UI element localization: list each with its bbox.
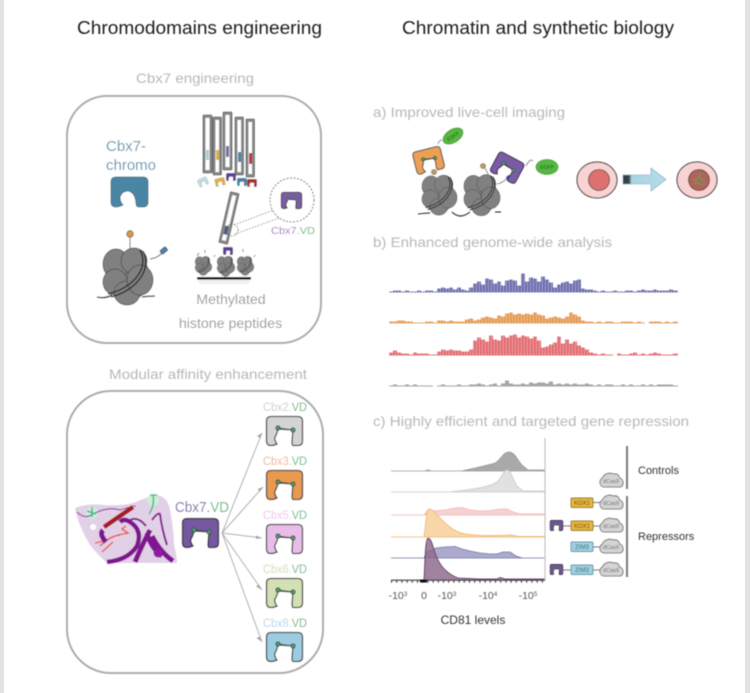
- axis label: CD81 levels: [441, 613, 505, 627]
- linker 1: [438, 140, 442, 144]
- construct: ZIM3: ZIM3: [575, 545, 589, 551]
- variant: Cbx6.VD: [263, 564, 307, 608]
- bracket: controls: [626, 446, 628, 489]
- ridge: VD-KOX1: [391, 509, 545, 537]
- heading: Cbx7 engineering: Cbx7 engineering: [136, 70, 254, 86]
- nucleosome pair with linker: [418, 164, 512, 216]
- icon: purple domain: [489, 151, 525, 184]
- label: Cbx7.VD: Cbx7.VD: [175, 500, 229, 516]
- title: chromatin and synthetic biology: Chromatin and synthetic biology: [402, 18, 674, 38]
- heading a: a) Improved live-cell imaging: [373, 104, 565, 120]
- variant: Cbx3.VD: Cbx3.VD: [263, 456, 307, 468]
- construct: VD-ZIM3: dCas9: [603, 568, 619, 574]
- caption: methylated histone peptides: Methylated: [196, 292, 266, 308]
- tick labels: -10: [438, 590, 453, 602]
- ridge: control 1: [391, 452, 545, 471]
- tick labels: -10: [479, 590, 494, 602]
- construct: KOX1: KOX1: [574, 501, 591, 507]
- tick labels: 3: [453, 591, 457, 598]
- cell after: [677, 162, 717, 198]
- EGFP tag 2: EGFP: [540, 165, 554, 171]
- heading: modular affinity enhancement: Modular affinity enhancement: [109, 366, 307, 382]
- tick labels: 0: [421, 590, 427, 602]
- icon: bound domain: [223, 247, 233, 255]
- label: Cbx7-chromo: Cbx7-: [106, 138, 146, 155]
- track: orange: [389, 312, 678, 324]
- tick labels: 5: [534, 591, 538, 598]
- label: Cbx7-chromo: chromo: [106, 157, 156, 174]
- arrows to variants: [222, 433, 263, 642]
- ridge: control 2: [391, 470, 545, 492]
- EGFP tag 2: [536, 160, 558, 174]
- title: chromodomains engineering: Chromodomains engineering: [77, 18, 322, 38]
- zoom callout of Cbx7.VD: [226, 178, 314, 236]
- icon: Cbx7 chromodomain: [111, 177, 148, 207]
- constructs: [550, 446, 695, 577]
- variant: Cbx8.VD: [263, 618, 307, 662]
- ridge: VD-ZIM3: [391, 538, 545, 580]
- cell before: [577, 162, 617, 198]
- construct: VD-KOX1: dCas9: [603, 524, 619, 530]
- methylated nucleosome array: [195, 249, 255, 284]
- variant: Cbx8.VD: Cbx8.VD: [263, 618, 307, 630]
- EGFP tag 1: [440, 125, 466, 147]
- construct: VD-ZIM3: ZIM3: [575, 568, 589, 574]
- track: red: [389, 334, 678, 356]
- axis: [391, 438, 545, 582]
- construct: VD-ZIM3: [550, 562, 623, 576]
- protein structure: [75, 494, 177, 563]
- icon: large nucleosome: [97, 231, 168, 305]
- variant: Cbx3.VD: [263, 456, 307, 500]
- construct: VD-KOX1: [550, 518, 623, 532]
- icon: Cbx7.VD domain: [182, 518, 218, 548]
- linker 2: [526, 160, 533, 166]
- left page edge: [0, 0, 4, 693]
- right page edge: [745, 0, 750, 693]
- EGFP tag 1: EGFP: [446, 130, 461, 143]
- track: blue: [389, 274, 678, 292]
- tick labels: 4: [494, 591, 498, 598]
- coloured domain variants: [197, 173, 257, 188]
- label: Cbx7.VD small: Cbx7.VD: [271, 225, 315, 237]
- construct: KOX1: dCas9: [603, 501, 619, 507]
- tick labels: -10: [519, 590, 534, 602]
- library of tubes: [203, 112, 254, 177]
- panel: modular affinity enhancement: [67, 391, 323, 673]
- dCas9 control: [600, 473, 623, 487]
- variant: Cbx6.VD: Cbx6.VD: [263, 564, 307, 576]
- variant: Cbx5.VD: Cbx5.VD: [263, 510, 307, 522]
- ridge: KOX1: [391, 508, 545, 515]
- construct: VD-KOX1: KOX1: [574, 524, 591, 530]
- selected tilted tube: [219, 192, 239, 244]
- variant: Cbx2.VD: Cbx2.VD: [263, 402, 307, 414]
- variant: Cbx5.VD: [263, 510, 307, 554]
- track: grey: [389, 380, 678, 386]
- variant: Cbx2.VD: [263, 402, 307, 446]
- heading c: c) Highly efficient and targeted gene repression: [373, 413, 689, 429]
- construct: KOX1: [571, 495, 623, 509]
- label: repressors: Repressors: [638, 531, 695, 543]
- arrow: [623, 168, 666, 191]
- construct: ZIM3: dCas9: [603, 545, 619, 551]
- dCas9 control: dCas9: [603, 479, 619, 485]
- ridge: ZIM3: [391, 546, 545, 558]
- fine bar texture: [389, 282, 678, 344]
- tick labels: -10: [389, 590, 404, 602]
- bracket: repressors: [626, 496, 628, 577]
- panel c: flow cytometry ridge plot: [389, 438, 545, 627]
- tick labels: 3: [404, 591, 408, 598]
- caption: methylated histone peptides: histone peptides: [179, 316, 282, 332]
- construct: ZIM3: [571, 539, 623, 553]
- panel b: genome tracks: [389, 274, 678, 386]
- heading b: b) Enhanced genome-wide analysis: [373, 234, 612, 250]
- tick labels: [389, 590, 538, 602]
- label: controls: Controls: [638, 465, 679, 477]
- icon: orange domain: [412, 146, 445, 175]
- panel a: live-cell imaging: [412, 125, 717, 216]
- panel: Cbx7 engineering: [67, 96, 321, 343]
